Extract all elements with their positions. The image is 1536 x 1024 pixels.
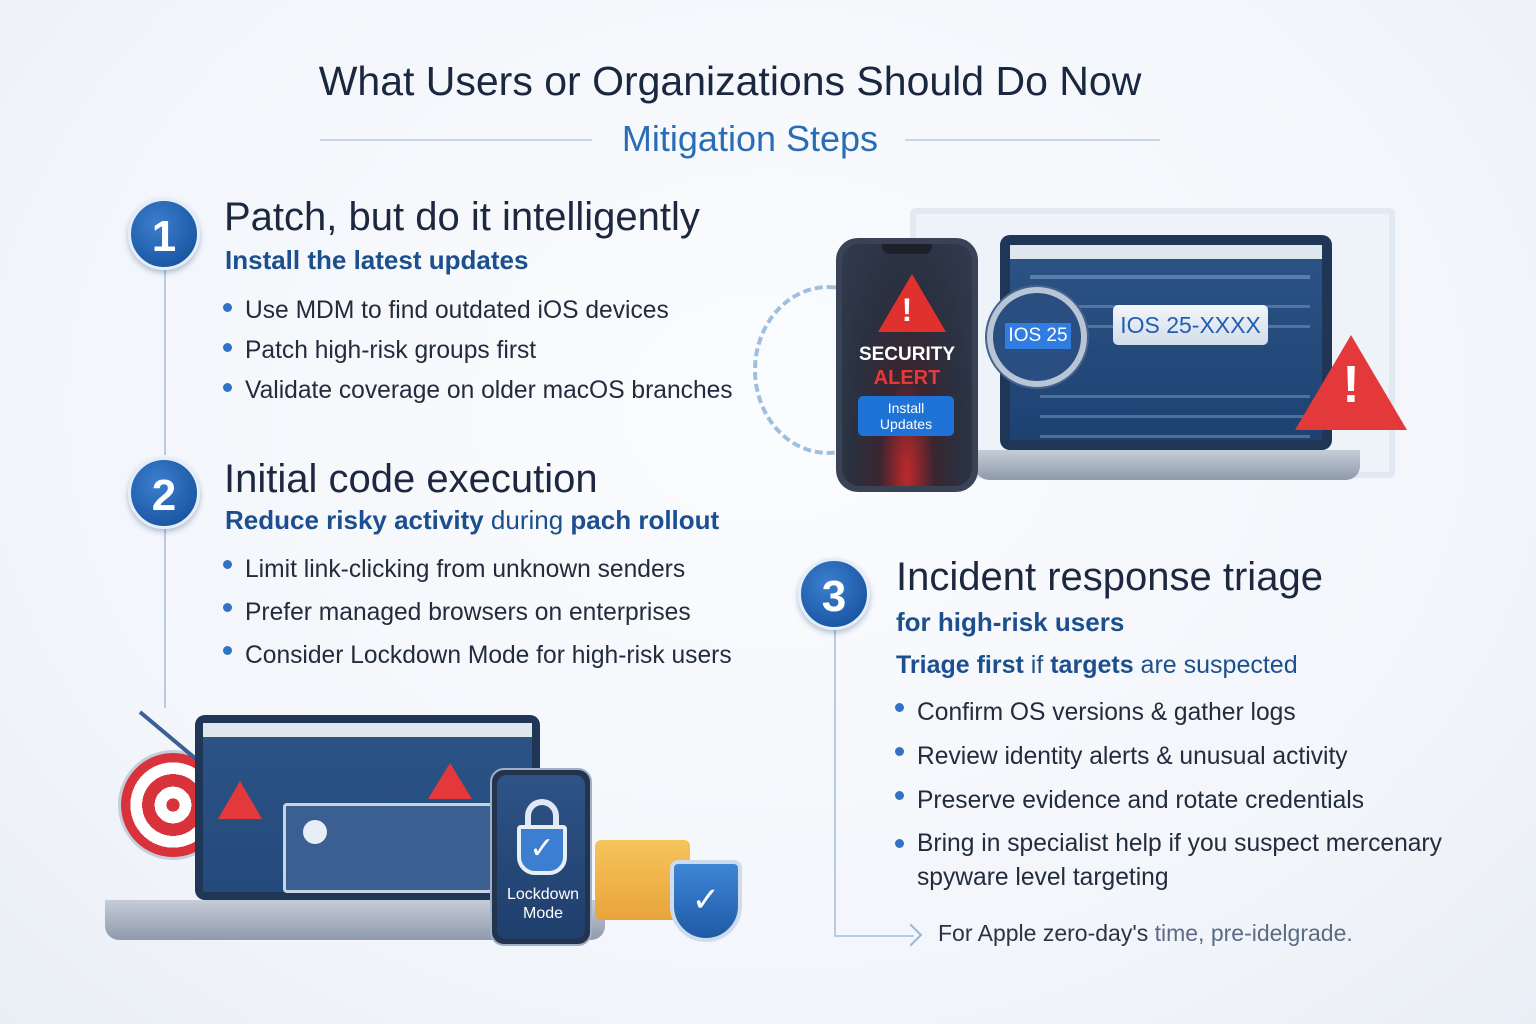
phone: SECURITY <box>859 344 955 365</box>
phone: Install <box>888 400 924 416</box>
bullets 3: Confirm OS versions & gather logs <box>917 699 1296 726</box>
bullets 2: Limit link-clicking from unknown senders <box>245 556 685 583</box>
icon: refresh arrow <box>753 285 903 455</box>
bullets 3: Review identity alerts & unusual activity <box>917 743 1348 770</box>
illustration: security alert phone and laptop <box>753 208 1407 492</box>
heading 3: Incident response triage <box>896 555 1323 599</box>
bullets 3: Bring in specialist help if you suspect mercenary <box>917 830 1442 857</box>
step 3 <box>794 555 1442 946</box>
magnifier <box>987 287 1087 387</box>
bullets 1: Use MDM to find outdated iOS devices <box>245 297 669 324</box>
bullets 1: Patch high-risk groups first <box>245 337 536 364</box>
magnifier: IOS 25 <box>1008 325 1068 346</box>
triage line: Triage first if targets are suspected <box>896 651 1298 679</box>
icon: target <box>118 750 228 860</box>
heading 2: Initial code execution <box>224 457 598 501</box>
illustration: lockdown mode devices <box>105 710 742 946</box>
footnote: For Apple zero-day's time, pre-idelgrade. <box>938 920 1353 946</box>
badge 3 <box>798 558 870 630</box>
phone: lockdown mode <box>490 768 592 946</box>
icon: shield: ✓ <box>692 881 720 919</box>
badge 1 <box>128 198 200 270</box>
laptop <box>195 715 540 900</box>
icon: warning triangle <box>1295 335 1407 430</box>
arrow: footnote pointer <box>900 924 922 946</box>
step 2 <box>124 456 732 669</box>
icon: folder <box>595 840 690 920</box>
bullets 2: Prefer managed browsers on enterprises <box>245 599 691 626</box>
bullets 3: spyware level targeting <box>917 864 1169 891</box>
phone: ! <box>902 292 912 328</box>
badge 1: 1 <box>152 212 176 261</box>
badge 2 <box>128 457 200 529</box>
bullets 3 <box>895 699 1442 891</box>
subheading 2: Reduce risky activity during pach rollout <box>225 505 719 535</box>
illustration: security alert phone and laptop: ! <box>1342 356 1360 414</box>
laptop: IOS 25-XXXX <box>1120 312 1261 338</box>
icon: shield <box>670 860 742 942</box>
phone: lockdown mode: Lockdown <box>507 886 579 903</box>
step 1 <box>124 195 733 404</box>
subheading 3: for high-risk users <box>896 607 1124 637</box>
badge 3: 3 <box>822 572 846 621</box>
bullets 1: Validate coverage on older macOS branches <box>245 377 733 404</box>
bullets 1 <box>223 297 733 404</box>
bullets 3: Preserve evidence and rotate credentials <box>917 787 1364 814</box>
title: What Users or Organizations Should Do Now <box>319 58 1141 104</box>
bullets 2: Consider Lockdown Mode for high-risk users <box>245 642 732 669</box>
heading 1: Patch, but do it intelligently <box>224 195 700 239</box>
laptop <box>1000 235 1332 450</box>
phone: Updates <box>880 416 932 432</box>
phone <box>836 238 978 492</box>
bullets 2 <box>223 556 732 669</box>
badge 2: 2 <box>152 471 176 520</box>
phone: lockdown mode: ✓ <box>529 832 555 865</box>
subtitle: mitigation steps: Mitigation Steps <box>622 118 878 159</box>
phone: lockdown mode: Mode <box>523 905 563 922</box>
subheading 1: Install the latest updates <box>225 245 528 275</box>
phone: ALERT <box>874 367 940 389</box>
